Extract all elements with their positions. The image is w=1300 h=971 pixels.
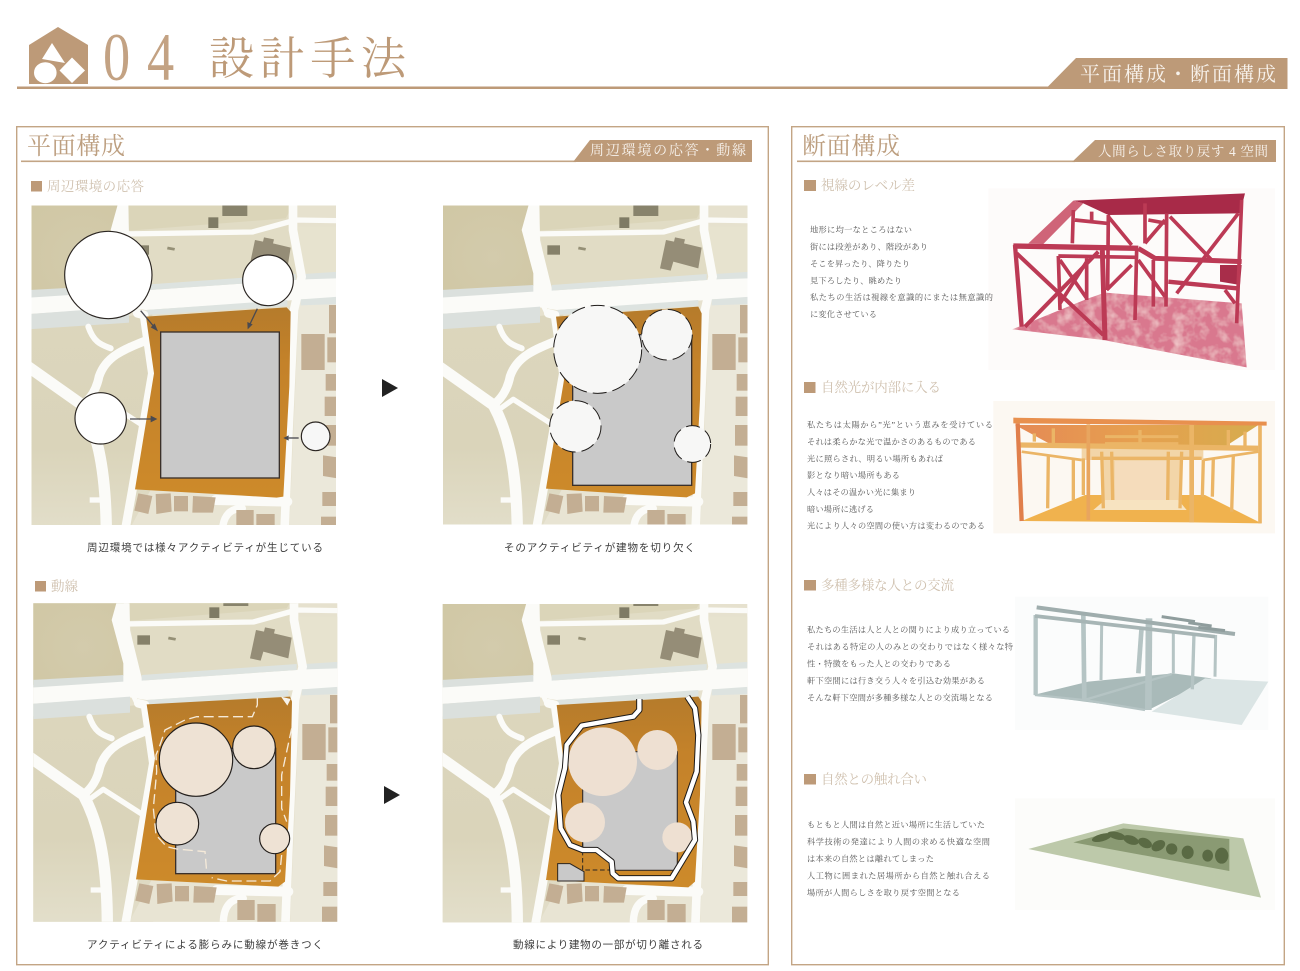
subheading: 視線のレベル差: 視線のレベル差 bbox=[821, 177, 915, 193]
text block: 多種多様な人との交流: 性・特徴をもった人との交わりである bbox=[807, 659, 951, 669]
illustration: red timber frame bbox=[988, 188, 1275, 370]
subheading: 自然との触れ合い: 自然との触れ合い bbox=[821, 772, 927, 787]
text block: 視線のレベル差: に変化させている bbox=[810, 309, 877, 319]
text block: 多種多様な人との交流: それはある特定の人のみとの交わりではなく様々な特 bbox=[807, 642, 1013, 652]
caption: map 4: 動線により建物の一部が切り離される bbox=[513, 938, 703, 951]
panel: 平面構成 bbox=[17, 127, 768, 965]
panel: 断面構成 bbox=[792, 127, 1284, 965]
panel heading: 断面構成: 断面構成 bbox=[802, 133, 900, 160]
illustration: orange timber frame bbox=[993, 401, 1275, 533]
text block: 視線のレベル差: 私たちの生活は視線を意識的にまたは無意識的 bbox=[810, 292, 993, 302]
illustration: grey eaves frame bbox=[1015, 597, 1268, 730]
subheading: 動線 bbox=[35, 579, 78, 594]
text block: 自然光が内部に入る: 光により人々の空間の使い方は変わるのである bbox=[807, 521, 985, 531]
panel tag: 人間らしさ取り戻す4空間: 人間らしさ取り戻す 4 空間 bbox=[1098, 143, 1268, 159]
text block: 多種多様な人との交流: そんな軒下空間が多種多様な人との交流場となる bbox=[807, 692, 993, 702]
subheading: 動線: 動線 bbox=[51, 579, 78, 594]
text block: 自然光が内部に入る: 影となり暗い場所もある bbox=[807, 470, 900, 480]
text block: 多種多様な人との交流: 軒下空間には行き交う人々を引込む効果がある bbox=[807, 675, 985, 685]
map 2: activities cut the building bbox=[437, 200, 750, 537]
text block: 多種多様な人との交流: 私たちの生活は人と人との関りにより成り立っている bbox=[807, 625, 1010, 635]
text block: 自然光が内部に入る: 私たちは太陽から”光”という恵みを受けている bbox=[807, 419, 993, 429]
caption: map 2: そのアクティビティが建物を切り欠く bbox=[504, 541, 695, 554]
header rule and tag bbox=[17, 58, 1288, 89]
text block: 自然光が内部に入る bbox=[807, 419, 993, 531]
text block: 自然光が内部に入る: 暗い場所に逃げる bbox=[807, 504, 874, 514]
map 4: circulation separates a part of the building bbox=[437, 590, 750, 927]
text block: 自然光が内部に入る: 人々はその温かい光に集まり bbox=[807, 487, 916, 497]
text block: 自然との触れ合い: は本来の自然とは離れてしまった bbox=[807, 853, 934, 863]
panel heading: 平面構成: 平面構成 bbox=[27, 133, 125, 160]
icon: house logo bbox=[29, 27, 88, 84]
text block: 視線のレベル差 bbox=[810, 224, 993, 319]
text block: 視線のレベル差: 地形に均一なところはない bbox=[810, 224, 912, 234]
text block: 多種多様な人との交流 bbox=[807, 625, 1013, 702]
header rule and tag: 平面構成・断面構成 bbox=[1080, 63, 1276, 86]
caption: map 3: アクティビティによる膨らみに動線が巻きつく bbox=[87, 938, 323, 951]
caption: map 1: 周辺環境では様々アクティビティが生じている bbox=[87, 541, 323, 554]
text block: 視線のレベル差: 見下ろしたり、眺めたり bbox=[810, 275, 902, 285]
map 1: surrounding activities bbox=[26, 200, 339, 537]
section number: 04 bbox=[103, 20, 174, 95]
text block: 視線のレベル差: そこを昇ったり、降りたり bbox=[810, 258, 910, 268]
title: 設計手法 bbox=[209, 34, 407, 84]
text block: 自然との触れ合い: 科学技術の発達により人間の求める快適な空間 bbox=[807, 836, 990, 846]
subheading: 自然光が内部に入る: 自然光が内部に入る bbox=[821, 379, 941, 395]
panel tag: 人間らしさ取り戻す4空間 bbox=[797, 140, 1276, 162]
illustration: green garden slab bbox=[1015, 798, 1275, 910]
subheading: 多種多様な人との交流: 多種多様な人との交流 bbox=[821, 577, 954, 593]
arrow: map 1 to map 2 bbox=[382, 379, 398, 397]
text block: 自然との触れ合い: 場所が人間らしさを取り戻す空間となる bbox=[807, 887, 960, 897]
text block: 視線のレベル差: 街には段差があり、階段があり bbox=[810, 241, 928, 251]
header bbox=[17, 20, 1288, 95]
subheading: 周辺環境の応答: 周辺環境の応答 bbox=[47, 178, 144, 194]
text block: 自然との触れ合い: 人工物に囲まれた居場所から自然と触れ合える bbox=[807, 870, 990, 880]
text block: 自然光が内部に入る: 光に照らされ、明るい場所もあれば bbox=[807, 453, 944, 463]
text block: 自然との触れ合い bbox=[807, 819, 990, 897]
arrow: map 3 to map 4 bbox=[384, 786, 400, 804]
text block: 自然光が内部に入る: それは柔らかな光で温かさのあるものである bbox=[807, 436, 976, 446]
panel tag: 周辺環境の応答・動線: 周辺環境の応答・動線 bbox=[590, 142, 746, 159]
panel tag: 周辺環境の応答・動線 bbox=[21, 140, 752, 162]
text block: 自然との触れ合い: もともと人間は自然と近い場所に生活していた bbox=[807, 819, 985, 829]
map 3: circulation wraps around swellings bbox=[27, 590, 340, 927]
